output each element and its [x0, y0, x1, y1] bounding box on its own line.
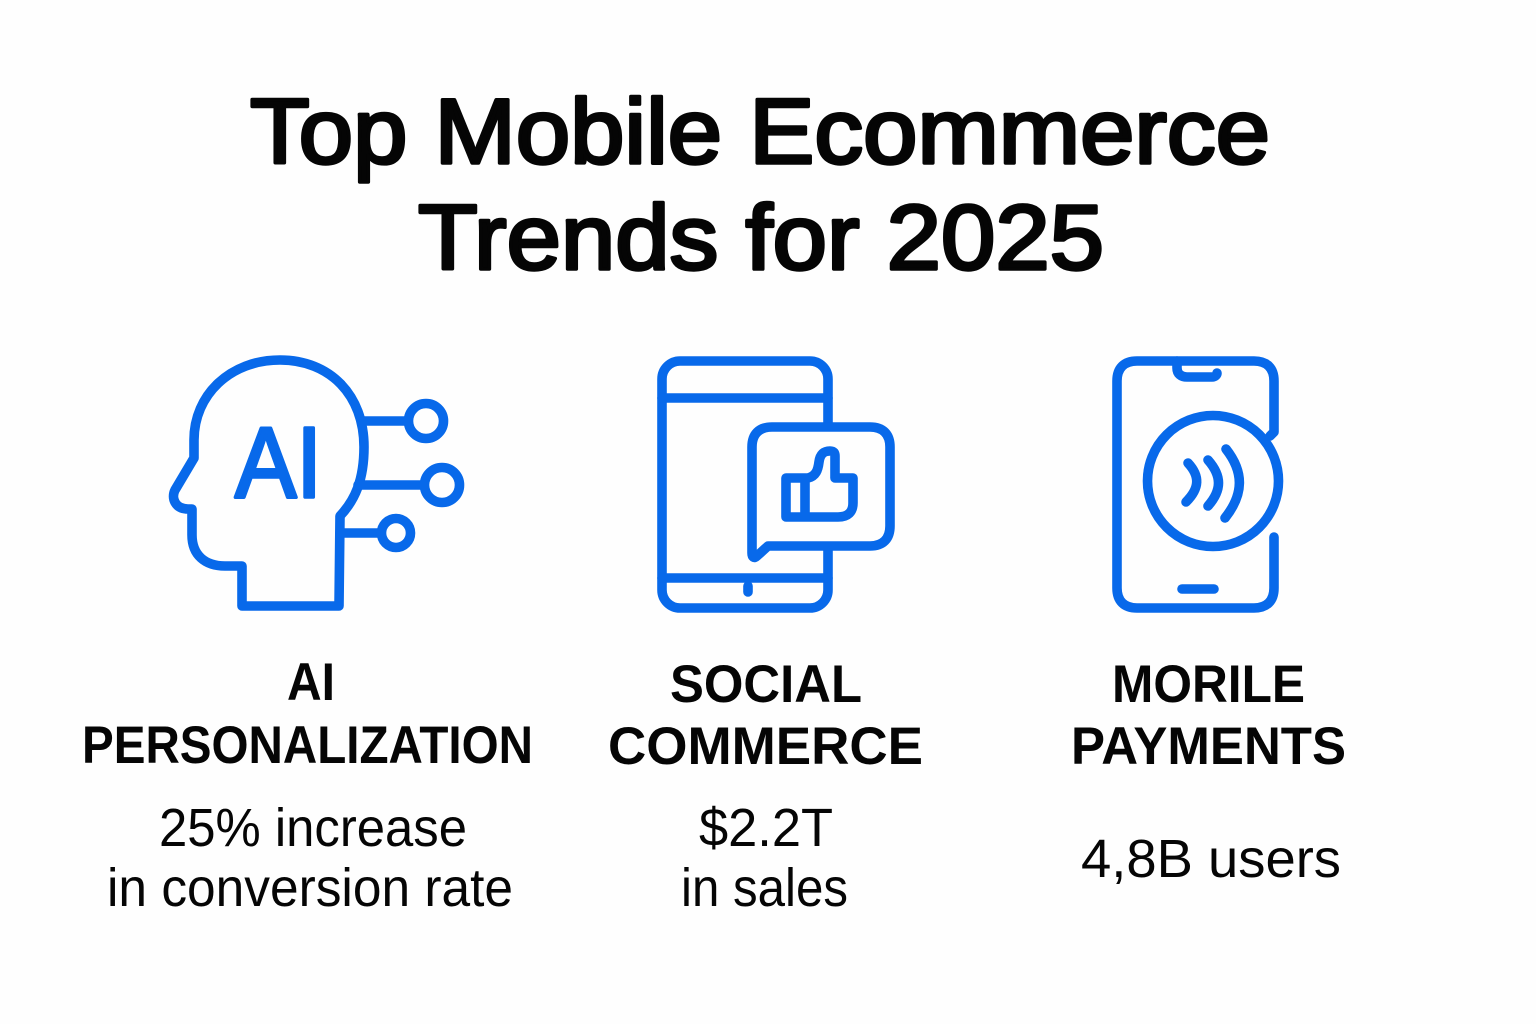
heading: AI personalization: PERSONALIZATION — [82, 716, 533, 775]
title — [250, 81, 1270, 289]
heading: mobile payments — [1071, 655, 1346, 776]
heading: mobile payments: PAYMENTS — [1071, 717, 1346, 776]
stat: conversion rate — [107, 798, 513, 918]
icon: tablet with thumbs-up speech bubble — [662, 361, 890, 608]
icon: phone with contactless payment circle — [1117, 361, 1278, 608]
heading: social commerce: SOCIAL — [670, 655, 862, 714]
title: Top Mobile Ecommerce — [250, 81, 1270, 183]
heading: AI personalization — [82, 653, 533, 775]
panel: AI personalization — [82, 360, 533, 918]
panel: mobile payments — [1071, 361, 1346, 889]
stat: sales: $2.2T — [699, 798, 833, 858]
stat: sales: in sales — [681, 858, 848, 918]
icon: AI head with network nodes — [174, 360, 460, 606]
heading: social commerce — [608, 655, 923, 776]
stat: sales — [681, 798, 848, 918]
icon: AI head with network nodes: AI — [235, 407, 322, 519]
stat: conversion rate: 25% increase — [159, 798, 467, 858]
heading: social commerce: COMMERCE — [608, 717, 923, 776]
heading: AI personalization: AI — [287, 653, 335, 712]
panel: social commerce — [608, 361, 923, 918]
title: Trends for 2025 — [418, 187, 1104, 289]
stat: users: 4,8B users — [1081, 829, 1341, 889]
heading: mobile payments: MORILE — [1112, 655, 1305, 714]
stat: conversion rate: in conversion rate — [107, 858, 513, 918]
